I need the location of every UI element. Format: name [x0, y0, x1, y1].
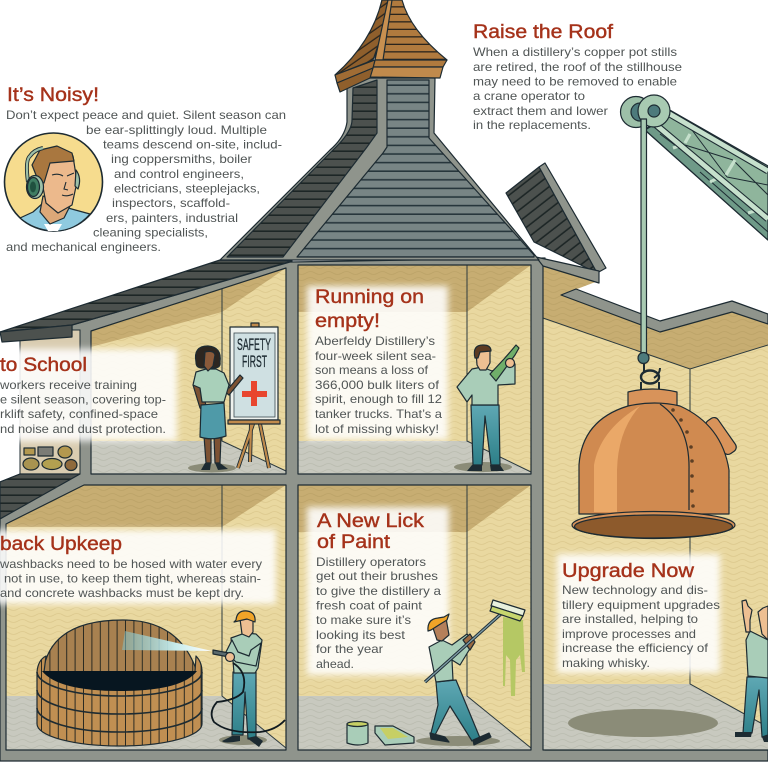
text: Running on empty: tanker trucks. That’s a — [315, 407, 442, 421]
text: Upgrade Now: tillery equipment upgrades — [562, 598, 720, 612]
safety first sign on easel: SAFETY — [237, 336, 271, 354]
text: Raise the Roof: Raise the Roof — [473, 22, 614, 43]
text: Running on empty: lot of missing whisky! — [315, 422, 439, 436]
text: It's Noisy — [6, 85, 286, 254]
text: A New Lick of Paint: for the year — [316, 642, 383, 656]
text: A New Lick of Paint: get out their brushes — [316, 569, 438, 583]
text: A New Lick of Paint: fresh coat of paint — [316, 598, 423, 612]
text: A New Lick of Paint: to make sure it’s — [316, 613, 411, 627]
text: A New Lick of Paint: looking its best — [316, 628, 406, 642]
building shell — [0, 258, 768, 761]
text: Running on empty: son means a loss of — [315, 363, 429, 377]
text: Upgrade Now — [562, 561, 720, 670]
text: A New Lick of Paint — [316, 511, 441, 671]
copper still — [572, 352, 738, 538]
text: Upgrade Now: making whisky. — [562, 656, 650, 670]
text: It's Noisy: electricians, steeplejacks, — [114, 182, 260, 196]
text: Upgrade Now: improve processes and — [562, 627, 696, 641]
text: It's Noisy: ers, painters, industrial — [106, 211, 238, 225]
worker with hose — [212, 611, 285, 747]
text: It's Noisy: and mechanical engineers. — [6, 240, 161, 254]
stillhouse tower — [220, 78, 539, 260]
left roof — [0, 260, 292, 342]
text: Back to School: e silent season, covering top- — [0, 392, 166, 406]
detached roof section — [506, 163, 606, 283]
text: Running on empty: four-week silent sea- — [315, 349, 436, 363]
safety first sign on easel — [228, 323, 280, 468]
text: Raise the Roof: may need to be removed to enable — [473, 74, 677, 88]
man looking up at still — [735, 600, 768, 742]
text: Washback Upkeep: not in use, to keep them tight, whereas stain- — [4, 572, 261, 586]
cupola roof — [335, 0, 447, 92]
text: Running on empty: empty! — [315, 311, 380, 332]
paint can and tray — [347, 722, 414, 745]
text: Upgrade Now: increase the efficiency of — [562, 641, 709, 655]
text: Back to School: nd noise and dust protection. — [0, 422, 166, 436]
washback tub — [37, 620, 202, 746]
text: Raise the Roof: When a distillery’s copper pot stills — [473, 45, 677, 59]
water spray — [122, 631, 212, 651]
text: It's Noisy: be ear-splittingly loud. Multiple — [86, 123, 267, 137]
text: It's Noisy: ing coppersmiths, boiler — [111, 152, 252, 166]
still shadow on floor — [568, 709, 718, 737]
text: It's Noisy: Don’t expect peace and quiet. Silent season can — [6, 108, 286, 122]
text: Raise the Roof: a crane operator to — [473, 89, 585, 103]
text: A New Lick of Paint: ahead. — [316, 657, 354, 671]
text: Upgrade Now: are installed, helping to — [562, 612, 698, 626]
text: Washback Upkeep — [0, 534, 262, 600]
room: lower middle — [298, 485, 531, 750]
text: It's Noisy: teams descend on-site, includ- — [103, 138, 282, 152]
portrait: worker with ear defenders — [4, 133, 102, 231]
text: Washback Upkeep: and concrete washbacks must be kept dry. — [0, 586, 244, 600]
text: Back to School — [0, 355, 166, 436]
text: Upgrade Now: New technology and dis- — [562, 583, 708, 597]
room: right stillhouse — [543, 265, 768, 750]
text panel backgrounds — [0, 286, 720, 675]
text: Raise the Roof: are retired, the roof of the stillhouse — [473, 60, 682, 74]
text: It's Noisy: It’s Noisy! — [7, 85, 99, 106]
worker with paint roller — [416, 600, 525, 746]
text: Raise the Roof: in the replacements. — [473, 118, 591, 132]
room: lower left — [6, 485, 286, 750]
room: upper middle — [298, 265, 531, 474]
text: Raise the Roof: extract them and lower — [473, 104, 608, 118]
text: A New Lick of Paint: of Paint — [317, 532, 391, 553]
text: It's Noisy: and control engineers, — [114, 167, 244, 181]
text: Raise the Roof — [473, 22, 682, 132]
chimney stone wall — [20, 330, 80, 474]
text: Back to School: to School — [0, 355, 87, 376]
safety first sign on easel: FIRST — [242, 353, 267, 371]
text: Running on empty — [315, 287, 442, 436]
lower left roof — [0, 474, 80, 519]
text: Washback Upkeep: back Upkeep — [0, 534, 122, 555]
text: Upgrade Now: Upgrade Now — [562, 561, 694, 582]
text: A New Lick of Paint: A New Lick — [317, 511, 425, 532]
text: Back to School: rklift safety, confined-space — [0, 407, 158, 421]
text: A New Lick of Paint: to give the distillery a — [316, 584, 441, 598]
text: A New Lick of Paint: Distillery operators — [316, 555, 426, 569]
text: Running on empty: Aberfeldy Distillery’s — [315, 334, 435, 348]
text: It's Noisy: cleaning specialists, — [93, 226, 208, 240]
text: Back to School: workers receive training — [0, 378, 137, 392]
text: Running on empty: 366,000 bulk liters of — [315, 378, 440, 392]
woman presenter — [188, 346, 243, 472]
room: upper left — [91, 268, 286, 474]
text: It's Noisy: inspectors, scaffold- — [112, 196, 230, 210]
crane — [620, 95, 768, 353]
text: Running on empty: Running on — [315, 287, 424, 308]
text: Running on empty: spirit, enough to fill 12 — [315, 392, 442, 406]
text: Washback Upkeep: washbacks need to be hosed with water every — [0, 557, 262, 571]
man with bottle — [454, 345, 519, 472]
